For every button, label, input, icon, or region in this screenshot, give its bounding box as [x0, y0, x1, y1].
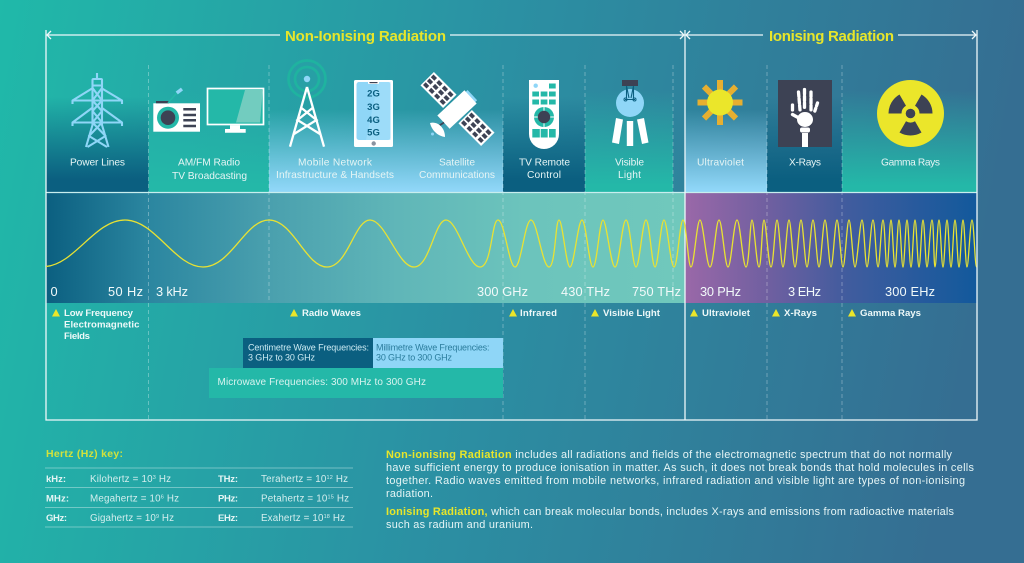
frequency scale labels: 50 Hz — [108, 284, 143, 299]
icon: satellite — [420, 72, 495, 146]
frequency scale labels — [50, 284, 935, 299]
callout: centimetre wave frequencies: 3 GHz to 30 GHz — [248, 352, 316, 362]
text block: non-ionising radiation description: radiation. — [386, 488, 433, 500]
table: hertz key: Hz — [330, 513, 345, 524]
table: hertz key: Hz — [159, 513, 174, 524]
callout: microwave frequencies — [209, 368, 503, 398]
icon labels: Gamma Rays — [881, 158, 940, 168]
callout: microwave frequencies: Microwave Frequencies: 300 MHz to 300 GHz — [218, 377, 426, 388]
icon: smartphone — [354, 80, 393, 147]
icon: tv remote — [529, 80, 559, 149]
icon labels: AM/FM Radio — [178, 158, 240, 168]
table: hertz key: Hz — [164, 494, 179, 504]
callout: millimetre wave frequencies — [373, 338, 503, 368]
icon: radio — [153, 89, 200, 132]
table: hertz key: Terahertz = 10 — [261, 474, 326, 485]
frequency scale labels: 430 THz — [561, 284, 610, 299]
icon: radiation trefoil, gamma rays — [877, 80, 944, 147]
icon: smartphone: 2G — [367, 88, 380, 100]
band names with yellow markers: Ultraviolet — [702, 308, 751, 319]
table: hertz key: Megahertz = 10 — [90, 494, 161, 504]
band names with yellow markers: X-Rays — [784, 308, 817, 319]
icon: power lines pylon — [72, 73, 122, 147]
panel: spectrum band — [46, 193, 977, 303]
frequency scale labels: 3 EHz — [788, 284, 821, 299]
table: hertz key: 18 — [324, 514, 330, 520]
table: hertz key — [45, 448, 353, 527]
table: hertz key: 6 — [161, 494, 164, 500]
table: hertz key: Hz — [156, 474, 171, 485]
icon: mobile network mast — [288, 60, 326, 147]
icon labels: Infrastructure & Handsets — [276, 170, 394, 181]
callout: centimetre wave frequencies — [243, 338, 373, 368]
table: hertz key: kHz: — [46, 474, 66, 485]
frequency scale labels: 3 kHz — [156, 284, 188, 299]
icon: light bulb — [612, 80, 648, 146]
icon labels — [70, 158, 940, 182]
band names with yellow markers: Low Frequency — [64, 308, 134, 319]
icon: smartphone: 3G — [367, 102, 380, 113]
table: hertz key: Hz — [333, 474, 348, 485]
table: hertz key: Exahertz = 10 — [261, 513, 323, 524]
heading: ionising radiation: Ionising Radiation — [769, 28, 894, 45]
table: hertz key: Petahertz = 10 — [261, 494, 327, 504]
table: hertz key: MHz: — [46, 494, 69, 504]
icon labels: Power Lines — [70, 158, 125, 168]
icon labels: TV Remote — [519, 158, 570, 168]
table: hertz key: Kilohertz = 10 — [90, 474, 153, 485]
icon labels: X-Rays — [789, 158, 821, 168]
chart: wave of increasing frequency — [46, 220, 976, 267]
icon labels: Ultraviolet — [697, 158, 744, 168]
band names with yellow markers: Infrared — [520, 308, 557, 319]
icon: television — [208, 88, 264, 133]
table: hertz key: THz: — [218, 474, 238, 485]
icon labels: Light — [618, 170, 641, 181]
icon: x-ray hand — [778, 80, 832, 147]
band names with yellow markers — [52, 308, 921, 342]
icon labels: Mobile Network — [298, 158, 373, 168]
frequency scale labels: 30 PHz — [700, 284, 741, 299]
frame and range brackets — [46, 30, 977, 420]
table: hertz key: Gigahertz = 10 — [90, 513, 156, 524]
callout: millimetre wave frequencies: 30 GHz to 300 GHz — [376, 352, 452, 362]
callout: millimetre wave frequencies: Millimetre Wave Frequencies: — [376, 342, 490, 352]
icon: sun, ultraviolet — [698, 80, 742, 125]
frequency scale labels: 300 GHz — [477, 284, 528, 299]
frequency scale labels: 300 EHz — [885, 284, 935, 299]
text block: non-ionising radiation description: together. Radio waves emitted from mobile networks, infrared radiation and visible light are types of non-ionising — [386, 475, 965, 487]
heading: non-ionising radiation: Non-Ionising Radiation — [285, 28, 446, 45]
text block: ionising radiation description: such as radium and uranium. — [386, 519, 533, 531]
table: hertz key: EHz: — [218, 513, 238, 524]
icon labels: TV Broadcasting — [172, 171, 247, 182]
table: hertz key: 9 — [156, 514, 159, 520]
table: hertz key: 15 — [327, 494, 334, 500]
frequency scale labels: 750 THz — [632, 284, 681, 299]
icon labels: Visible — [615, 158, 644, 168]
table: hertz key: PHz: — [218, 494, 238, 504]
text block: ionising radiation description — [386, 506, 955, 531]
table: hertz key: GHz: — [46, 513, 67, 524]
icon labels: Satellite — [439, 158, 475, 168]
icon labels: Control — [527, 170, 561, 181]
callout: centimetre wave frequencies: Centimetre Wave Frequencies: — [248, 342, 369, 352]
band names with yellow markers: Radio Waves — [302, 308, 361, 319]
text block: non-ionising radiation description — [386, 449, 975, 500]
text block: non-ionising radiation description: Non-ionising Radiation includes all radiations and fields of the electromagnetic spectrum that do not normally — [386, 449, 953, 461]
band names with yellow markers: Gamma Rays — [860, 308, 921, 319]
band names with yellow markers: Fields — [64, 331, 90, 342]
icon labels: Communications — [419, 170, 495, 181]
icon: smartphone: 5G — [367, 128, 380, 138]
table: hertz key: Hertz (Hz) key: — [46, 448, 123, 460]
table: hertz key: 12 — [326, 475, 333, 481]
frequency scale labels: 0 — [50, 284, 58, 299]
text block: non-ionising radiation description: have sufficient energy to produce ionisation in matter. As such, it does not break bonds that hold molecules in cells — [386, 462, 975, 474]
table: hertz key: 3 — [153, 475, 156, 481]
band names with yellow markers: Electromagnetic — [64, 320, 140, 330]
band names with yellow markers: Visible Light — [603, 308, 661, 319]
table: hertz key: Hz — [334, 494, 349, 504]
icon: smartphone: 4G — [367, 115, 380, 126]
panel: icon column backgrounds — [46, 65, 977, 192]
text block: ionising radiation description: Ionising Radiation, which can break molecular bonds, includes X-rays and emissions from radioactive materials — [386, 506, 955, 518]
